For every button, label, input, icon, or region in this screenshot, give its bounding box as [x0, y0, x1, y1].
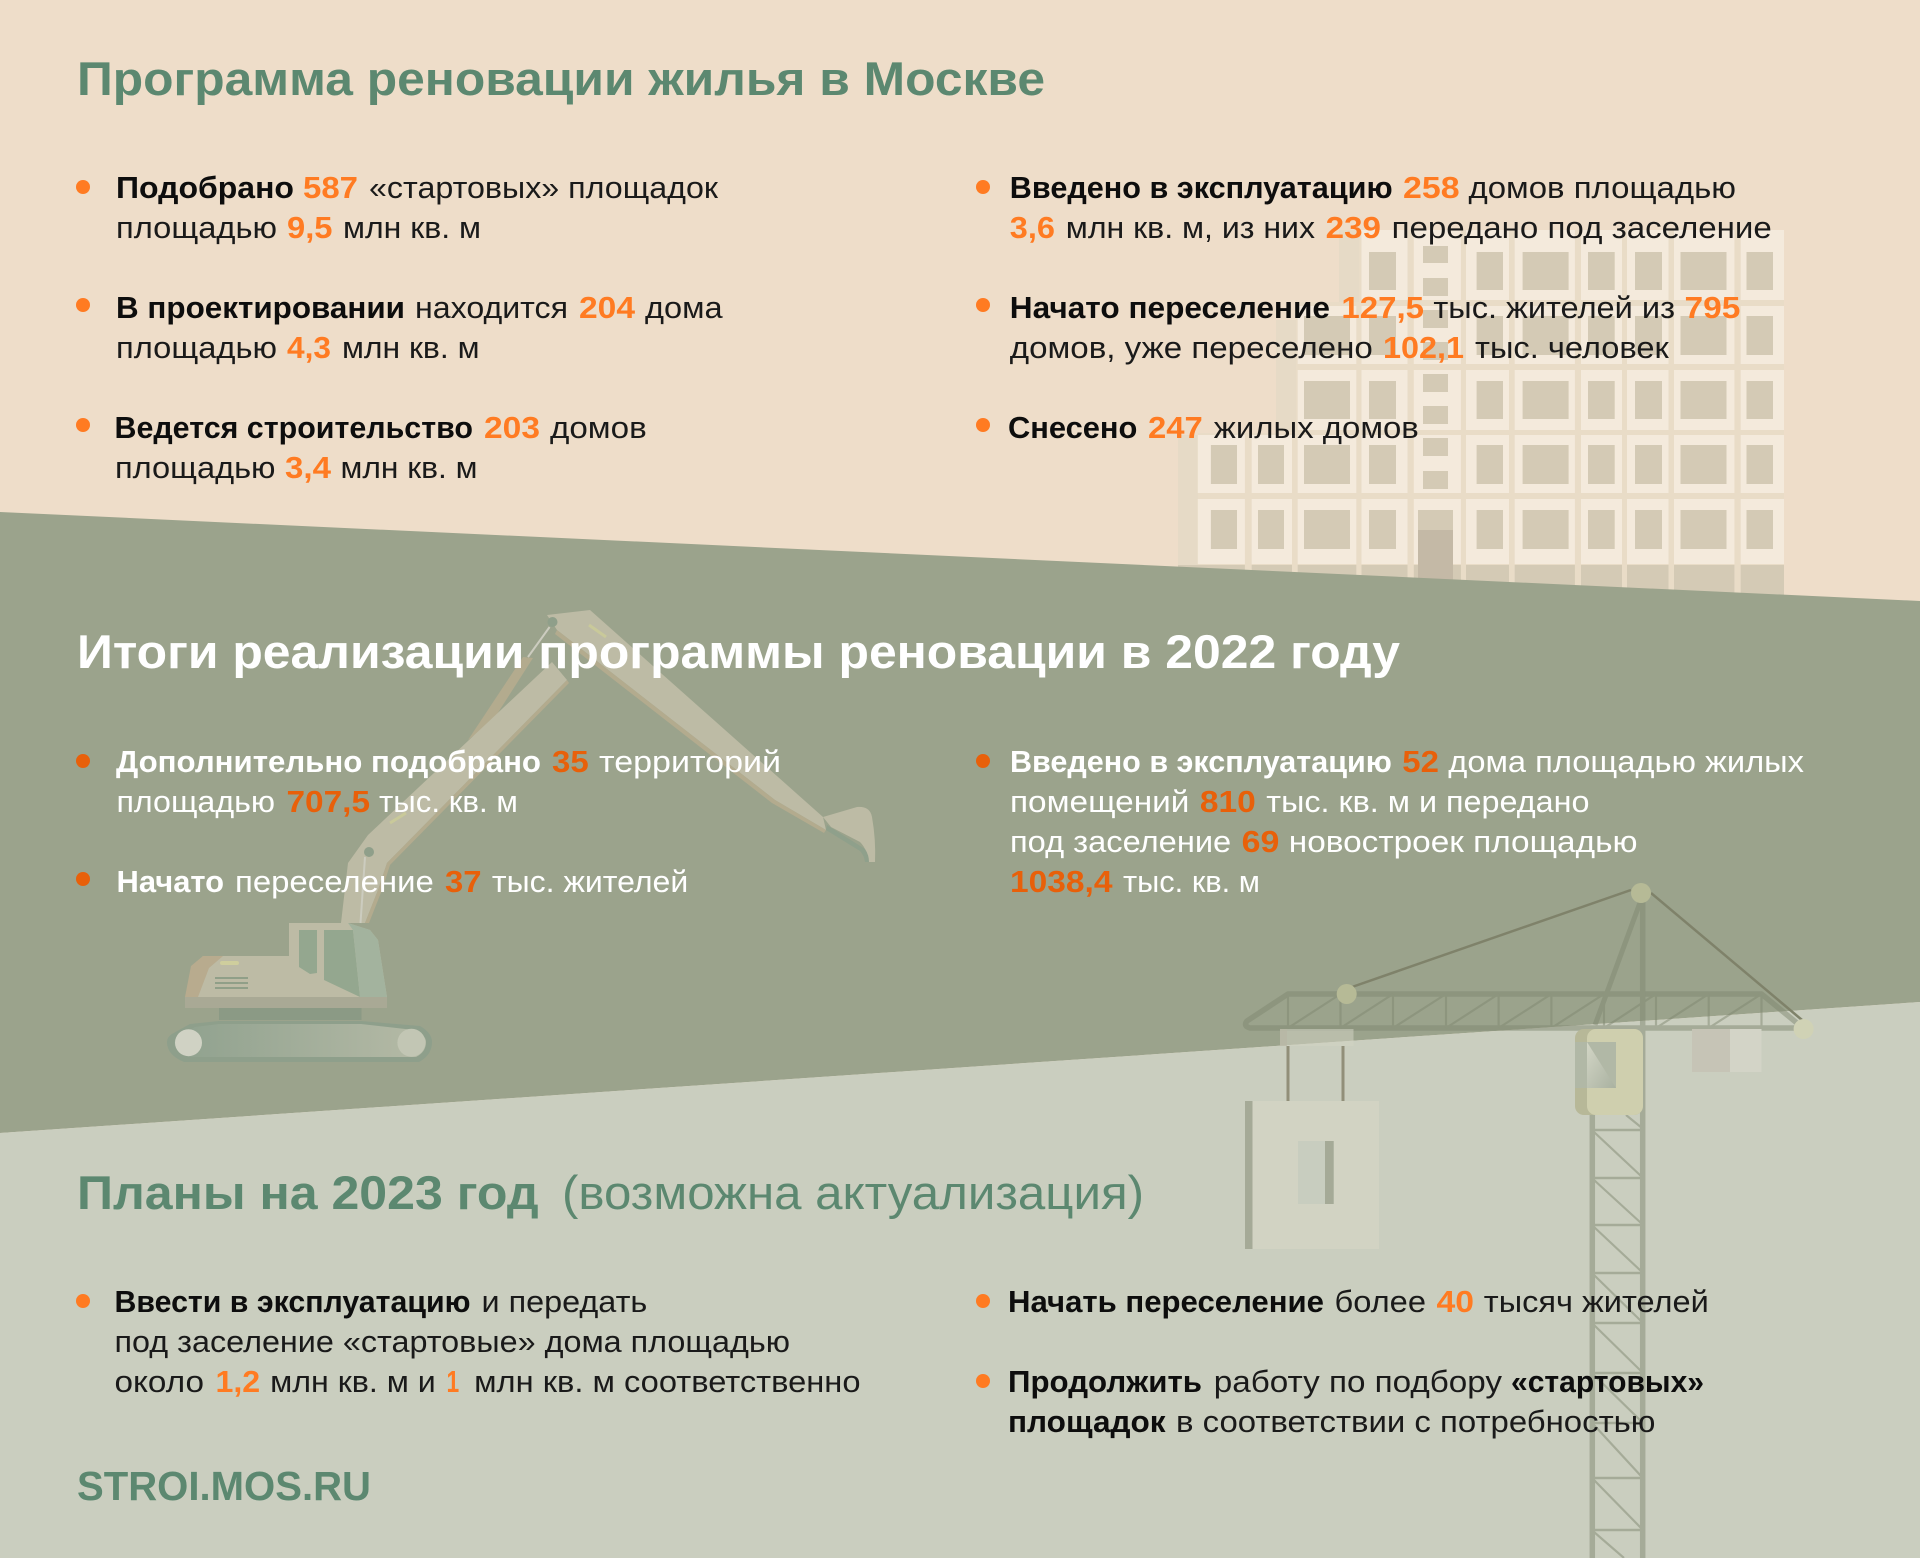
item: begin resettlement: Начать переселение: [1008, 1284, 1324, 1319]
item: commissioned: [976, 170, 1772, 245]
item: continue site selection: Продолжить: [1008, 1364, 1202, 1399]
item: under construction: площадью: [115, 450, 276, 485]
item: demolished: 247: [1148, 410, 1203, 445]
panel: 2022 results right column: 1038,4: [1010, 864, 1113, 899]
item: resettlement: 127,5: [1341, 290, 1424, 325]
illustration: apartment building: [1178, 230, 1784, 605]
item: resettlement: тыс. жителей из: [1433, 290, 1675, 325]
item: resettlement started: 37: [445, 864, 482, 899]
item: under construction: домов: [550, 410, 647, 445]
item: additional sites: тыс. кв. м: [379, 784, 518, 819]
item: continue site selection: «стартовых»: [1511, 1364, 1704, 1399]
item: selected sites: Подобрано: [116, 170, 294, 205]
item: commissioned: Введено в эксплуатацию: [1010, 170, 1393, 205]
item: begin resettlement: тысяч жителей: [1484, 1284, 1709, 1319]
item: commissioned: 258: [1403, 170, 1460, 205]
panel: 2022 results right column: под заселение: [1010, 824, 1231, 859]
item: additional sites: территорий: [599, 744, 781, 779]
item: begin resettlement: 40: [1436, 1284, 1474, 1319]
panel: 2022 results right column: новостроек площадью: [1289, 824, 1638, 859]
item: additional sites: [76, 744, 781, 819]
item: additional sites: 707,5: [286, 784, 370, 819]
panel: 2022 results right column: тыс. кв. м и передано: [1266, 784, 1590, 819]
item: commissioned: 239: [1326, 210, 1381, 245]
item: under construction: млн кв. м: [340, 450, 478, 485]
item: demolished: Снесено: [1008, 410, 1137, 445]
heading: 2023 plans: Планы на 2023 год: [77, 1166, 539, 1219]
item: resettlement: Начато переселение: [1010, 290, 1330, 325]
item: resettlement: [976, 290, 1740, 365]
panel: 2023 plans left column: млн кв. м соответственно: [474, 1364, 860, 1399]
panel: 2022 results right column: 810: [1200, 784, 1256, 819]
item: commissioned: млн кв. м, из них: [1066, 210, 1316, 245]
item: selected sites: «стартовых» площадок: [369, 170, 718, 205]
item: in design: дома: [645, 290, 723, 325]
footer: source link: STROI.MOS.RU: [77, 1463, 371, 1509]
item: in design: площадью: [116, 330, 277, 365]
item: under construction: 3,4: [285, 450, 332, 485]
item: in design: млн кв. м: [342, 330, 480, 365]
illustration: tower crane: [1245, 883, 1814, 1558]
item: additional sites: площадью: [116, 784, 275, 819]
panel: 2022 results right column: 69: [1242, 824, 1279, 859]
item: resettlement started: Начато: [116, 864, 224, 899]
hanging concrete panel: [1245, 1101, 1379, 1249]
crane cab: [1575, 1029, 1643, 1115]
crane stay cables: [1352, 890, 1802, 1020]
panel: 2023 plans left column: под заселение «стартовые» дома площадью: [114, 1324, 790, 1359]
item: under construction: Ведется строительство: [114, 410, 473, 445]
panel: programme status right column: [976, 170, 1772, 445]
panel: 2023 plans left column: Ввести в эксплуатацию: [114, 1284, 470, 1319]
item: selected sites: площадью: [116, 210, 277, 245]
item: commissioned: 3,6: [1010, 210, 1055, 245]
item: additional sites: 35: [552, 744, 589, 779]
panel: 2023 plans left column: млн кв. м и: [270, 1364, 436, 1399]
item: in design: 4,3: [287, 330, 331, 365]
heading: 2023 plans: (возможна актуализация): [562, 1166, 1144, 1219]
item: in design: В проектировании: [116, 290, 405, 325]
panel: 2022 results right column: тыс. кв. м: [1123, 864, 1260, 899]
panel: 2022 results right column: Введено в эксплуатацию: [1010, 744, 1392, 779]
crane counterweight: [1280, 1029, 1354, 1046]
item: continue site selection: работу по подбору: [1214, 1364, 1503, 1399]
item: in design: [76, 290, 723, 365]
hanging cables: [1288, 1046, 1343, 1101]
panel: 2022 results right column: 52: [1402, 744, 1439, 779]
item: additional sites: Дополнительно подобрано: [116, 744, 541, 779]
panel: 2022 results right column: дома площадью жилых: [1448, 744, 1804, 779]
panel: 2023 plans left column: около: [114, 1364, 204, 1399]
item: selected sites: 9,5: [287, 210, 332, 245]
item: continue site selection: [976, 1364, 1704, 1439]
item: under construction: 203: [484, 410, 540, 445]
panel: 2023 plans left column: и передать: [482, 1284, 647, 1319]
item: resettlement: 102,1: [1383, 330, 1464, 365]
panel: 2023 plans left column: [76, 1284, 860, 1399]
heading: 2023 plans: [77, 1166, 1144, 1219]
item: in design: находится: [415, 290, 568, 325]
item: begin resettlement: более: [1334, 1284, 1426, 1319]
item: commissioned: домов площадью: [1468, 170, 1736, 205]
item: selected sites: млн кв. м: [343, 210, 481, 245]
item: resettlement: 795: [1684, 290, 1740, 325]
item: continue site selection: в соответствии с потребностью: [1176, 1404, 1656, 1439]
background: olive middle band: [0, 512, 1920, 1133]
item: commissioned: передано под заселение: [1392, 210, 1772, 245]
panel: 2023 plans right column: [976, 1284, 1709, 1439]
item: begin resettlement: [976, 1284, 1709, 1319]
item: resettlement: тыс. человек: [1475, 330, 1669, 365]
illustration: excavator: [167, 610, 875, 1062]
panel: 2023 plans left column: 1,2: [216, 1364, 260, 1399]
heading: 2022 results: Итоги реализации программы реновации в 2022 году: [77, 625, 1400, 678]
item: resettlement started: переселение: [235, 864, 434, 899]
item: demolished: жилых домов: [1214, 410, 1419, 445]
item: resettlement started: [76, 864, 688, 899]
panel: 2022 results left column: [76, 744, 781, 899]
crane truss and mast: [1246, 893, 1803, 1558]
item: under construction: [76, 410, 647, 485]
crane joints: [1337, 883, 1814, 1039]
item: selected sites: [76, 170, 718, 245]
item: resettlement started: тыс. жителей: [492, 864, 688, 899]
heading: main title: Программа реновации жилья в Москве: [77, 52, 1045, 105]
item: demolished: [976, 410, 1419, 445]
item: resettlement: домов, уже переселено: [1010, 330, 1373, 365]
item: continue site selection: площадок: [1008, 1404, 1166, 1439]
background: pale bottom band: [0, 1002, 1920, 1558]
panel: programme status left column: [76, 170, 723, 485]
panel: 2022 results right column: [976, 744, 1804, 899]
right crane block: [1692, 1029, 1762, 1072]
item: selected sites: 587: [303, 170, 358, 205]
item: in design: 204: [579, 290, 636, 325]
panel: 2022 results right column: помещений: [1010, 784, 1189, 819]
panel: 2023 plans left column: 1: [446, 1364, 459, 1399]
